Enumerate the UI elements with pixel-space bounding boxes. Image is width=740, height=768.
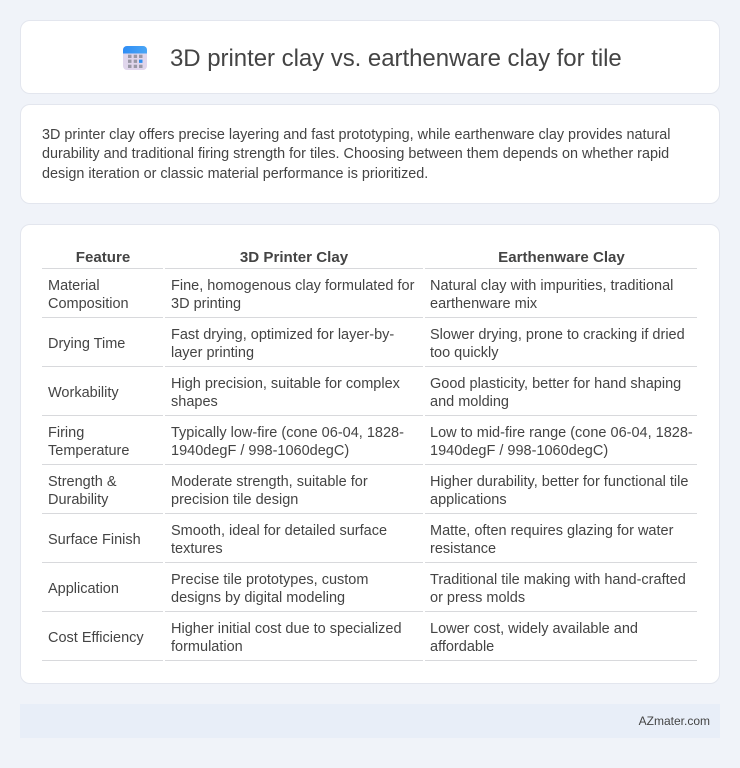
row: Surface Finish: Surface Finish (48, 532, 141, 548)
row: Cost Efficiency: Cost Efficiency (48, 630, 144, 646)
table header (42, 249, 697, 269)
row: Cost Efficiency: Lower cost, widely available and (430, 621, 638, 637)
row: Firing Temperature: Firing (48, 425, 84, 441)
summary paragraph: durability and traditional firing strength for tiles. Choosing between them depends on whether rapid (42, 146, 669, 162)
row: Strength & Durability (42, 474, 697, 514)
row: Application: Traditional tile making with hand-crafted (430, 572, 686, 588)
row: Firing Temperature: Temperature (48, 443, 129, 459)
row: Drying Time: Drying Time (48, 336, 125, 352)
row: Application: or press molds (430, 590, 525, 606)
row: Strength & Durability: Moderate strength, suitable for (171, 474, 368, 490)
table header: Feature (76, 249, 130, 266)
row: Application: Application (48, 581, 119, 597)
row: Drying Time (42, 327, 697, 367)
row: Workability: Good plasticity, better for hand shaping (430, 376, 681, 392)
row: Surface Finish: Matte, often requires glazing for water (430, 523, 673, 539)
row: Cost Efficiency: Higher initial cost due to specialized (171, 621, 402, 637)
row: Drying Time: layer printing (171, 345, 254, 361)
row: Workability: High precision, suitable for complex (171, 376, 400, 392)
row: Material Composition: Natural clay with impurities, traditional (430, 278, 673, 294)
title: 3D printer clay vs. earthenware clay for tile (170, 45, 622, 72)
icon: calendar (123, 46, 147, 70)
row: Surface Finish: Smooth, ideal for detailed surface (171, 523, 387, 539)
row: Application: designs by digital modeling (171, 590, 345, 606)
comparison table (42, 249, 697, 661)
row: Drying Time: Fast drying, optimized for layer-by- (171, 327, 394, 343)
row: Drying Time: Slower drying, prone to cracking if dried (430, 327, 685, 343)
footer brand text: AZmater.com (639, 714, 710, 728)
table header: Earthenware Clay (498, 249, 625, 266)
summary paragraph (42, 127, 670, 182)
row: Surface Finish: textures (171, 541, 223, 557)
row: Material Composition: Material (48, 278, 100, 294)
row: Strength & Durability: Durability (48, 492, 108, 508)
row: Workability (42, 376, 697, 416)
table header: 3D Printer Clay (240, 249, 348, 266)
row: Application: Precise tile prototypes, custom (171, 572, 368, 588)
row: Material Composition: earthenware mix (430, 296, 537, 312)
row: Material Composition: 3D printing (171, 296, 241, 312)
row: Workability: Workability (48, 385, 119, 401)
row: Firing Temperature (42, 425, 697, 465)
row: Material Composition (42, 278, 697, 318)
row: Strength & Durability: applications (430, 492, 507, 508)
row: Cost Efficiency: formulation (171, 639, 243, 655)
row: Drying Time: too quickly (430, 345, 499, 361)
row: Strength & Durability: Higher durability, better for functional tile (430, 474, 688, 490)
row: Cost Efficiency: affordable (430, 639, 494, 655)
row: Surface Finish (42, 523, 697, 563)
row: Firing Temperature: Typically low-fire (cone 06-04, 1828- (171, 425, 404, 441)
row: Material Composition: Fine, homogenous clay formulated for (171, 278, 414, 294)
panel: summary text (20, 104, 720, 204)
panel: title card (20, 20, 720, 94)
row: Strength & Durability: precision tile design (171, 492, 298, 508)
row: Firing Temperature: 1940degF / 998-1060degC) (171, 443, 349, 459)
row: Workability: shapes (171, 394, 218, 410)
summary paragraph: 3D printer clay offers precise layering and fast prototyping, while earthenware clay provides natural (42, 127, 670, 143)
summary paragraph: design iteration or classic material performance is prioritized. (42, 166, 428, 182)
row: Workability: and molding (430, 394, 509, 410)
row: Firing Temperature: Low to mid-fire range (cone 06-04, 1828- (430, 425, 693, 441)
row: Application (42, 572, 697, 612)
panel: comparison table (20, 224, 720, 684)
row: Cost Efficiency (42, 621, 697, 661)
footer bar (20, 704, 720, 738)
row: Strength & Durability: Strength & (48, 474, 117, 490)
row: Firing Temperature: 1940degF / 998-1060degC) (430, 443, 608, 459)
row: Surface Finish: resistance (430, 541, 496, 557)
row: Material Composition: Composition (48, 296, 129, 312)
